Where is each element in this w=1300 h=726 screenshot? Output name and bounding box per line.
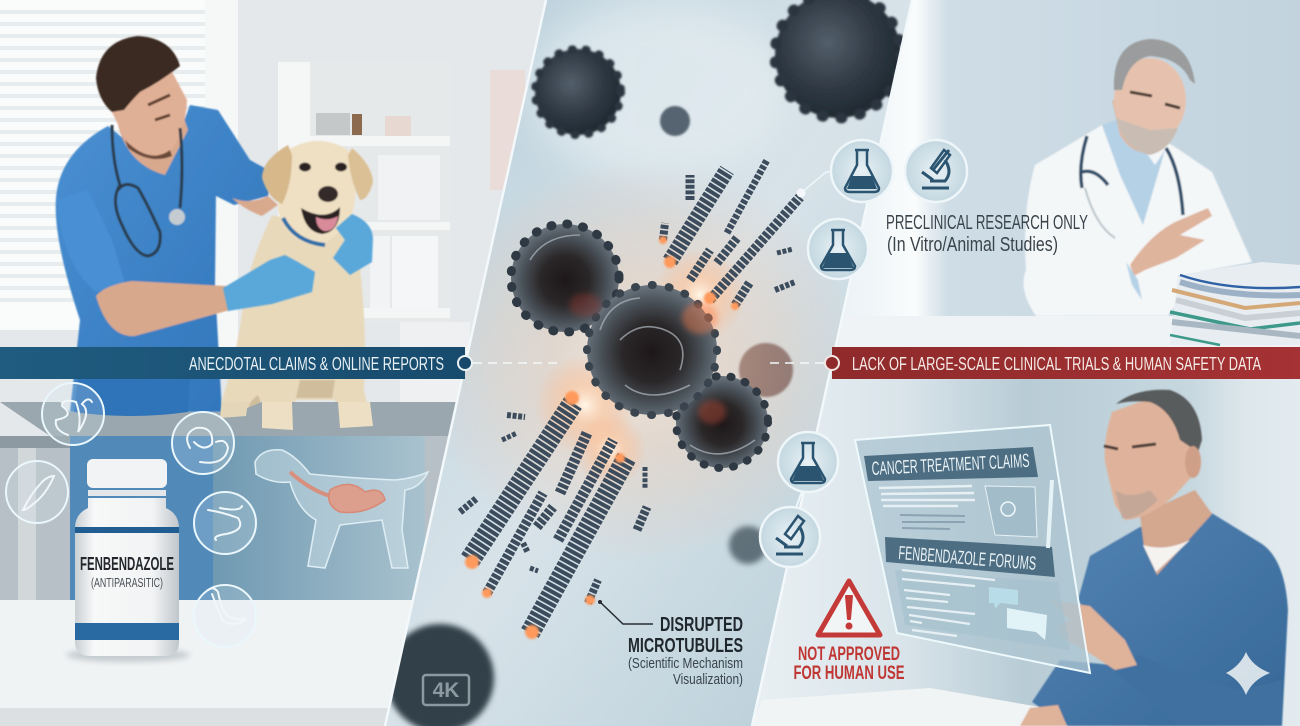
fenbendazole forums header: FENBENDAZOLE FORUMS [898,543,1037,575]
band: anecdotal claims [0,347,472,379]
white counter [0,600,412,710]
panel: microtubule visualization [380,0,920,726]
cancer cells [386,0,901,726]
dashed connector [473,362,825,364]
4K badge: 4K [433,679,459,702]
bottle label: FENBENDAZOLE [80,554,174,574]
callout: disrupted microtubules [598,600,743,688]
bottle label [80,557,174,590]
orange glow [460,191,824,528]
dog paws on table [262,402,373,430]
orange sparks [465,236,739,639]
callout connector to research icons [796,172,832,198]
icon: microscope [905,140,967,202]
exam table [0,402,456,600]
window blinds [0,0,238,350]
4K badge [423,675,469,705]
icon: lower flask [778,432,838,492]
cancer treatment claims header: CANCER TREATMENT CLAIMS [871,451,1030,480]
icon link line [796,491,802,508]
preclinical research label: PRECLINICAL RESEARCH ONLY [886,212,1088,234]
table [752,688,1150,726]
warning: not approved [794,581,904,684]
warning: not approved: NOT APPROVED [798,644,900,665]
band: lack of clinical trials [825,347,1300,379]
lower room [756,379,1230,726]
white shelving unit [278,60,450,322]
callout: disrupted microtubules: Visualization) [673,671,743,688]
parasite icon circles [5,382,257,600]
doctor [1024,39,1252,316]
central cell cluster [511,224,768,468]
vet lower scrubs [74,379,190,416]
fenbendazole forums header [885,537,1055,577]
panel: veterinary clinic [0,0,560,726]
preclinical research label [886,212,1088,256]
disrupted microtubules [460,160,800,633]
panel: clinician and research [750,0,1300,726]
callout: disrupted microtubules: DISRUPTED [660,614,743,636]
warning: not approved: FOR HUMAN USE [794,663,904,684]
star mark [1226,652,1270,695]
glass panel: online forums [855,425,1090,673]
icon: flask half full [808,219,868,279]
callout: disrupted microtubules: (Scientific Mechanism [628,655,743,672]
dog [220,141,373,430]
medicine bottle [66,459,190,662]
panel dividers [385,0,912,726]
veterinarian [56,36,278,412]
callout: disrupted microtubules: MICROTUBULES [628,635,743,657]
preclinical research label: (In Vitro/Animal Studies) [887,234,1058,256]
icon: flask with bubbles [831,140,893,202]
icon: lower microscope [760,507,820,567]
band: anecdotal claims: ANECDOTAL CLAIMS & ONLINE REPORTS [189,354,444,374]
man in blue sweater [1020,390,1288,726]
cancer treatment claims header [864,447,1038,481]
stack of binders [1170,262,1300,345]
blue gloves [223,214,373,311]
bottle label: (ANTIPARASITIC) [91,575,163,590]
hologram dog diagram [255,450,428,568]
